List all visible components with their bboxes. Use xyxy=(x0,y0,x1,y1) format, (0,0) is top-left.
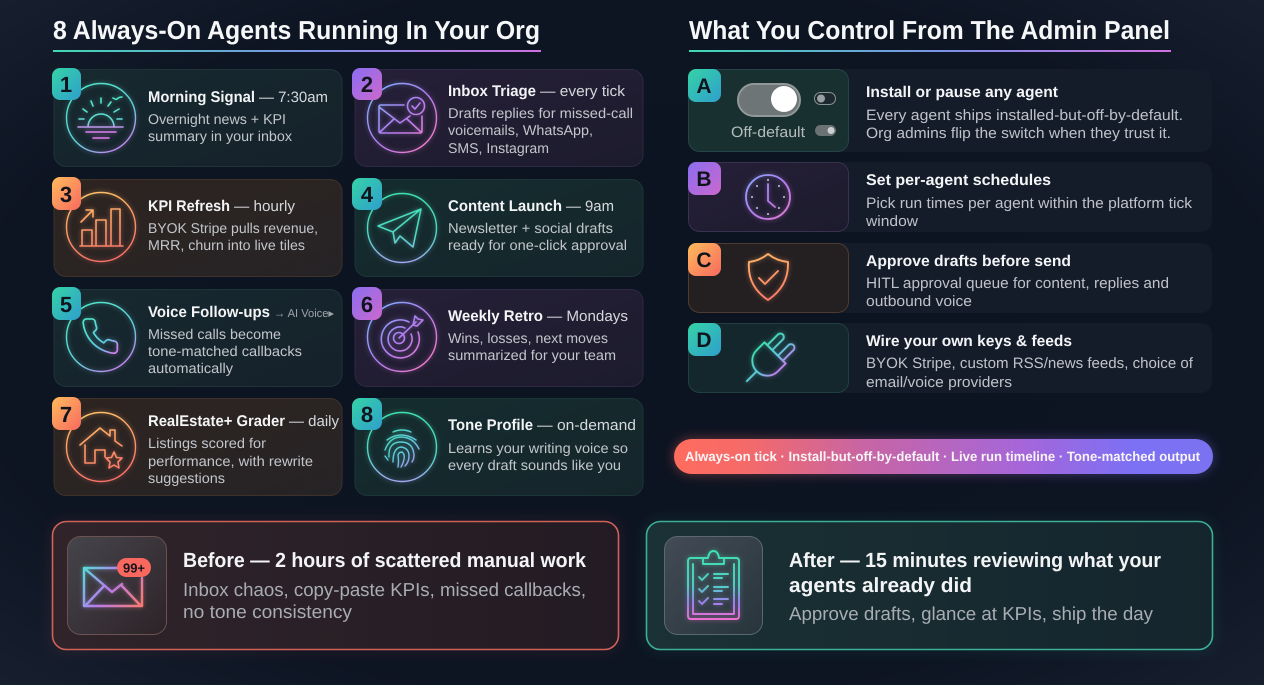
card 4: Content Launch xyxy=(352,178,643,276)
icon: target xyxy=(368,302,436,372)
card text: — Mondays xyxy=(547,308,628,325)
row text: BYOK Stripe, custom RSS/news feeds, choice of xyxy=(866,355,1194,372)
after text: After — 15 minutes reviewing what your xyxy=(789,549,1161,572)
icon: plug xyxy=(736,329,799,392)
badge 7: 7 xyxy=(60,402,72,427)
icon: shield check xyxy=(749,254,788,300)
card text: Content Launch xyxy=(448,198,562,215)
card text: suggestions xyxy=(148,471,225,487)
row text: Org admins flip the switch when they trust it. xyxy=(866,125,1171,142)
card text: — hourly xyxy=(234,198,295,215)
badge C: C xyxy=(696,249,712,272)
icon: overflowing inbox xyxy=(68,536,166,634)
card text: Tone Profile xyxy=(448,417,533,434)
badge 5: 5 xyxy=(60,292,72,317)
card text: Weekly Retro xyxy=(448,308,543,325)
row B: schedules xyxy=(688,162,1212,232)
card text: Learns your writing voice so xyxy=(448,441,628,457)
badge 3 xyxy=(52,177,81,210)
card text: MRR, churn into live tiles xyxy=(148,238,305,254)
card text: — every tick xyxy=(540,83,626,100)
card text: automatically xyxy=(148,361,234,377)
badge B: B xyxy=(696,168,712,191)
card text: Inbox Triage xyxy=(448,83,536,100)
row text: outbound voice xyxy=(866,293,972,310)
feature pill xyxy=(674,439,1213,474)
before text: no tone consistency xyxy=(183,601,353,622)
icon: house with star xyxy=(66,412,136,482)
icon: phone xyxy=(66,302,136,372)
card text: Voice Follow-ups xyxy=(148,304,270,321)
card text xyxy=(148,198,318,254)
badge 2 xyxy=(352,68,382,100)
card text xyxy=(448,417,636,474)
card text xyxy=(448,308,628,364)
badge 3: 3 xyxy=(60,182,72,207)
feature pill: Always-on tick · Install-but-off-by-default · Live run timeline · Tone-matched output xyxy=(685,449,1200,464)
badge C xyxy=(688,243,721,276)
badge 1 xyxy=(52,68,81,100)
badge 6 xyxy=(352,287,382,320)
badge 5 xyxy=(52,287,81,320)
icon: paper plane xyxy=(368,194,436,262)
card text: KPI Refresh xyxy=(148,198,230,215)
badge 6: 6 xyxy=(361,292,373,317)
badge D: D xyxy=(696,329,712,352)
badge 4 xyxy=(352,178,382,210)
row D: keys and feeds xyxy=(688,323,1212,393)
card text: SMS, Instagram xyxy=(448,141,549,157)
badge 4: 4 xyxy=(361,182,374,207)
badge 8: 8 xyxy=(361,402,373,427)
card text xyxy=(148,89,328,145)
heading: agents: 8 Always-On Agents Running In Your Org xyxy=(53,15,540,45)
card text: Morning Signal xyxy=(148,89,255,106)
row text: email/voice providers xyxy=(866,374,1012,391)
row text: Pick run times per agent within the platform tick xyxy=(866,195,1193,212)
row text xyxy=(866,253,1169,310)
card 1: Morning Signal xyxy=(52,68,342,166)
badge 8 xyxy=(352,398,382,430)
icon: clipboard checklist xyxy=(664,536,762,634)
card text: → AI Voice▸ xyxy=(274,308,334,320)
card 5: Voice Follow-ups xyxy=(52,287,342,386)
card text: Wins, losses, next moves xyxy=(448,331,608,347)
card text: BYOK Stripe pulls revenue, xyxy=(148,221,318,237)
badge D xyxy=(688,323,721,356)
badge B xyxy=(688,162,721,195)
card text: every draft sounds like you xyxy=(448,458,621,474)
icon: envelope check xyxy=(368,84,436,152)
row text xyxy=(866,84,1183,142)
panel: before xyxy=(52,521,619,650)
card 7: RealEstate+ Grader xyxy=(52,397,342,496)
card text: summarized for your team xyxy=(448,348,616,364)
row text: window xyxy=(865,213,918,230)
icon: toggles xyxy=(731,84,836,141)
card 3: KPI Refresh xyxy=(52,177,342,276)
card text: tone-matched callbacks xyxy=(148,344,302,360)
icon: toggles: Off-default xyxy=(731,124,806,141)
after text: agents already did xyxy=(789,574,972,597)
row text: HITL approval queue for content, replies and xyxy=(866,275,1169,292)
card text xyxy=(148,413,339,487)
card text: — 7:30am xyxy=(259,89,328,106)
card text: summary in your inbox xyxy=(148,129,292,145)
row text: Every agent ships installed-but-off-by-default. xyxy=(866,107,1183,124)
before text: Before — 2 hours of scattered manual work xyxy=(183,549,587,572)
card text: — 9am xyxy=(566,198,614,215)
row text xyxy=(866,333,1194,391)
card 2: Inbox Triage xyxy=(352,68,643,166)
row text: Wire your own keys & feeds xyxy=(866,333,1072,350)
badge 1: 1 xyxy=(60,72,72,97)
heading: admin panel: What You Control From The Admin Panel xyxy=(689,15,1170,45)
row text xyxy=(865,172,1193,230)
row text: Approve drafts before send xyxy=(866,253,1071,270)
icon: fingerprint xyxy=(368,412,436,482)
badge A: A xyxy=(696,75,712,98)
card text: — on-demand xyxy=(537,417,636,434)
card text: RealEstate+ Grader xyxy=(148,413,285,430)
row text: Set per-agent schedules xyxy=(866,172,1051,189)
row C: approve drafts xyxy=(688,243,1212,313)
panel: after xyxy=(646,521,1213,650)
after text: Approve drafts, glance at KPIs, ship the day xyxy=(789,603,1154,624)
icon: sunrise xyxy=(66,84,136,152)
card 6: Weekly Retro xyxy=(352,287,643,386)
before text xyxy=(183,549,587,622)
card text: Overnight news + KPI xyxy=(148,112,286,128)
icon: overflowing inbox: 99+ xyxy=(123,560,145,576)
badge 2: 2 xyxy=(361,72,373,97)
card text: voicemails, WhatsApp, xyxy=(448,123,593,139)
card text: Drafts replies for missed-call xyxy=(448,106,633,122)
icon: bar chart xyxy=(66,192,136,262)
card text xyxy=(448,198,627,254)
card text: Listings scored for xyxy=(148,436,266,452)
card text: Missed calls become xyxy=(148,327,281,343)
card text: ready for one-click approval xyxy=(448,238,627,254)
row text: Install or pause any agent xyxy=(866,84,1058,101)
row A: install or pause xyxy=(688,69,1212,152)
card text: — daily xyxy=(289,413,339,430)
card 8: Tone Profile xyxy=(352,398,643,496)
badge 7 xyxy=(52,397,81,430)
icon: clock xyxy=(746,175,790,219)
before text: Inbox chaos, copy-paste KPIs, missed callbacks, xyxy=(183,579,586,600)
card text xyxy=(448,83,633,157)
after text xyxy=(789,549,1161,624)
card text: Newsletter + social drafts xyxy=(448,221,613,237)
card text: performance, with rewrite xyxy=(148,454,313,470)
badge A xyxy=(688,69,721,102)
card text xyxy=(148,304,334,377)
